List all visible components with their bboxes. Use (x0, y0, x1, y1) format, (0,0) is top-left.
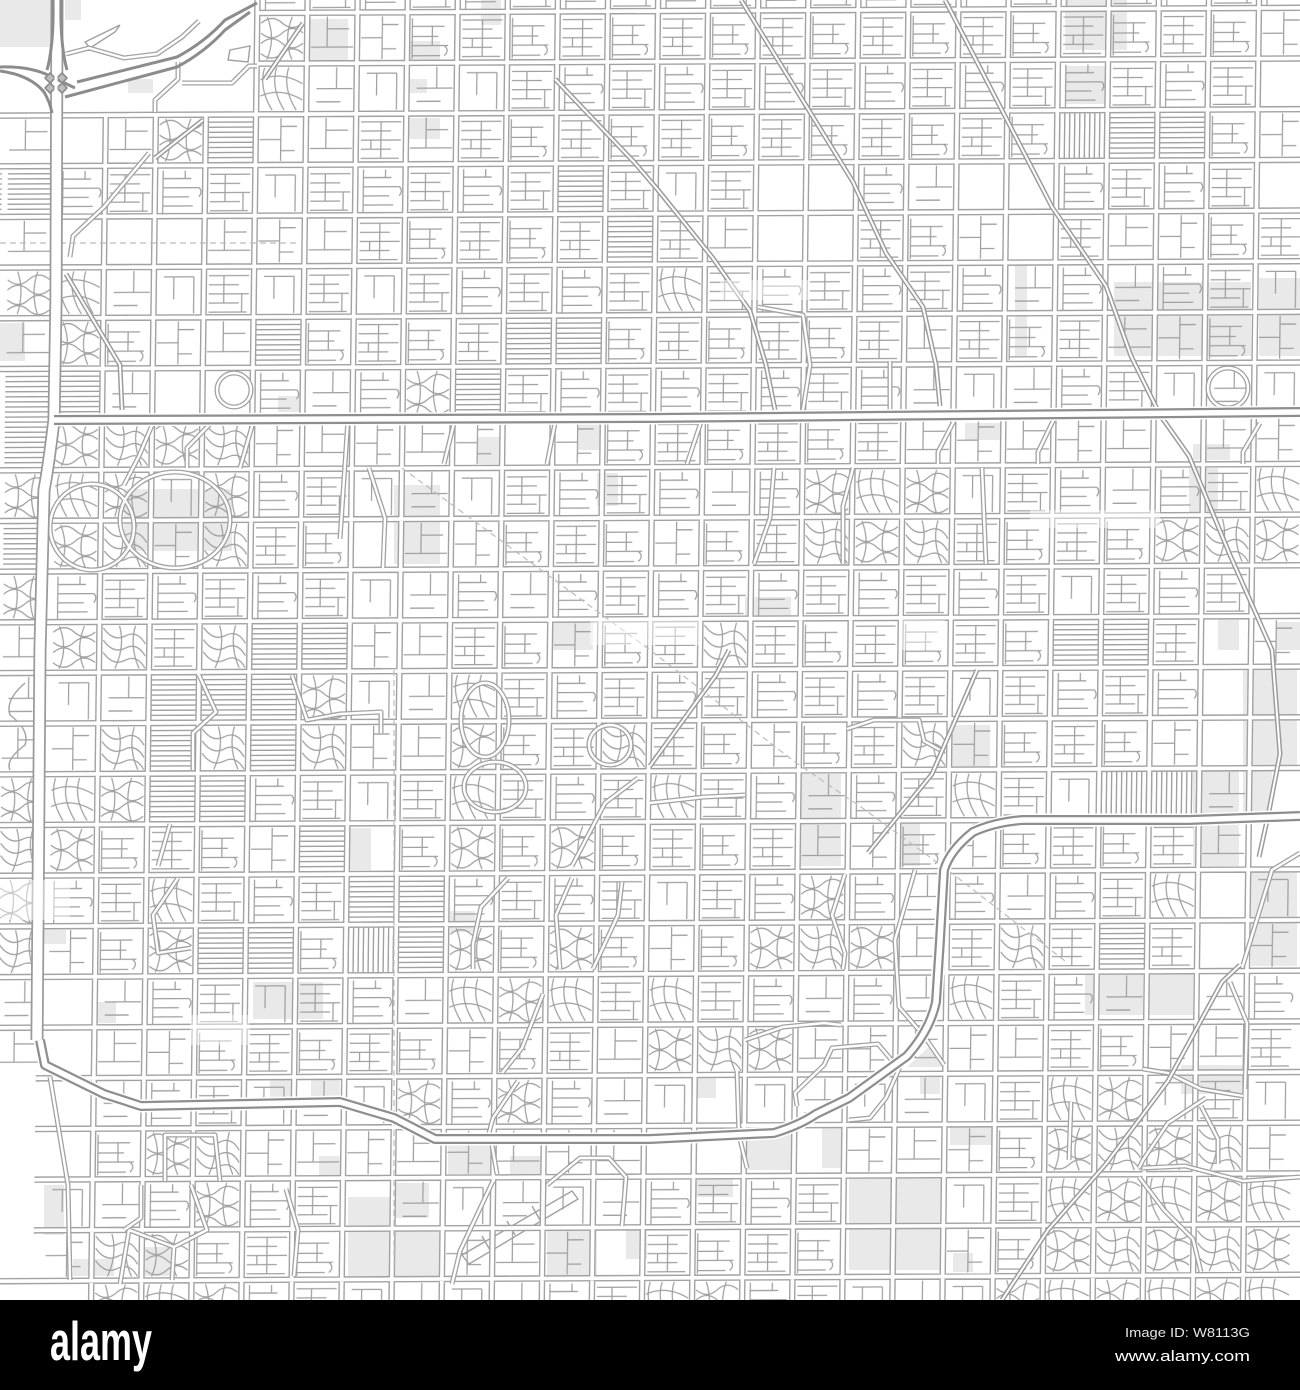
dashed utility lines (0, 243, 1065, 1270)
northwest freeway interchange (0, 0, 257, 115)
footer bar (0, 1300, 1300, 1390)
faded watermark glare (0, 280, 1160, 1045)
logo wordmark: alamy (50, 1310, 152, 1372)
image id: Image ID: W8113G (1125, 1325, 1250, 1340)
freeways (37, 0, 1300, 1139)
dense horizontal street blocks (0, 110, 1208, 977)
dense vertical street blocks (346, 110, 1208, 975)
minor curved roads (9, 25, 578, 1264)
website: www.alamy.com (1114, 1349, 1250, 1365)
